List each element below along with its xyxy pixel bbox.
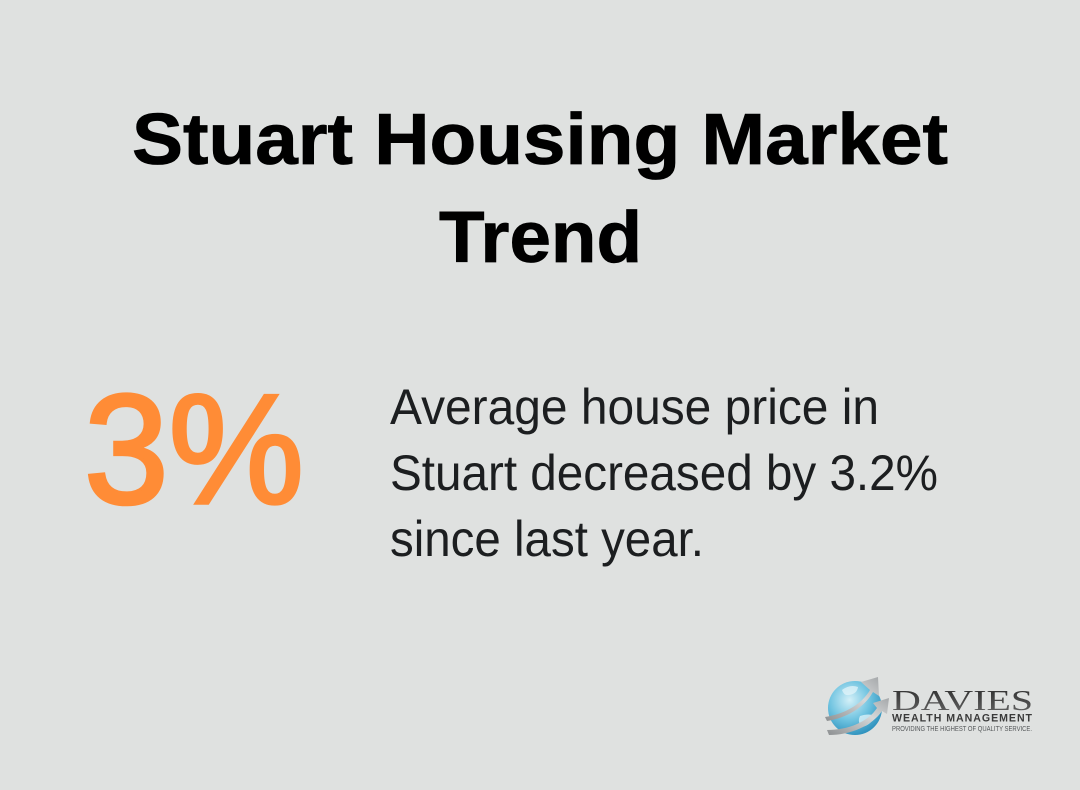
big statistic: 3%: 3%	[84, 363, 304, 537]
logo subtitle: WEALTH MANAGEMENT	[892, 712, 1033, 724]
statistic description: since last year.	[390, 511, 704, 567]
title: Trend	[439, 198, 642, 278]
title: Stuart Housing Market	[132, 100, 948, 180]
statistic description: Stuart decreased by 3.2%	[390, 445, 938, 501]
statistic description	[390, 379, 938, 567]
logo tagline: PROVIDING THE HIGHEST OF QUALITY SERVICE.	[892, 726, 1032, 733]
logo: Davies Wealth Management	[825, 677, 1033, 735]
logo wordmark: DAVIES	[892, 686, 1033, 717]
statistic description: Average house price in	[390, 379, 879, 435]
title	[132, 100, 948, 278]
icon: globe with arrows	[825, 677, 889, 735]
